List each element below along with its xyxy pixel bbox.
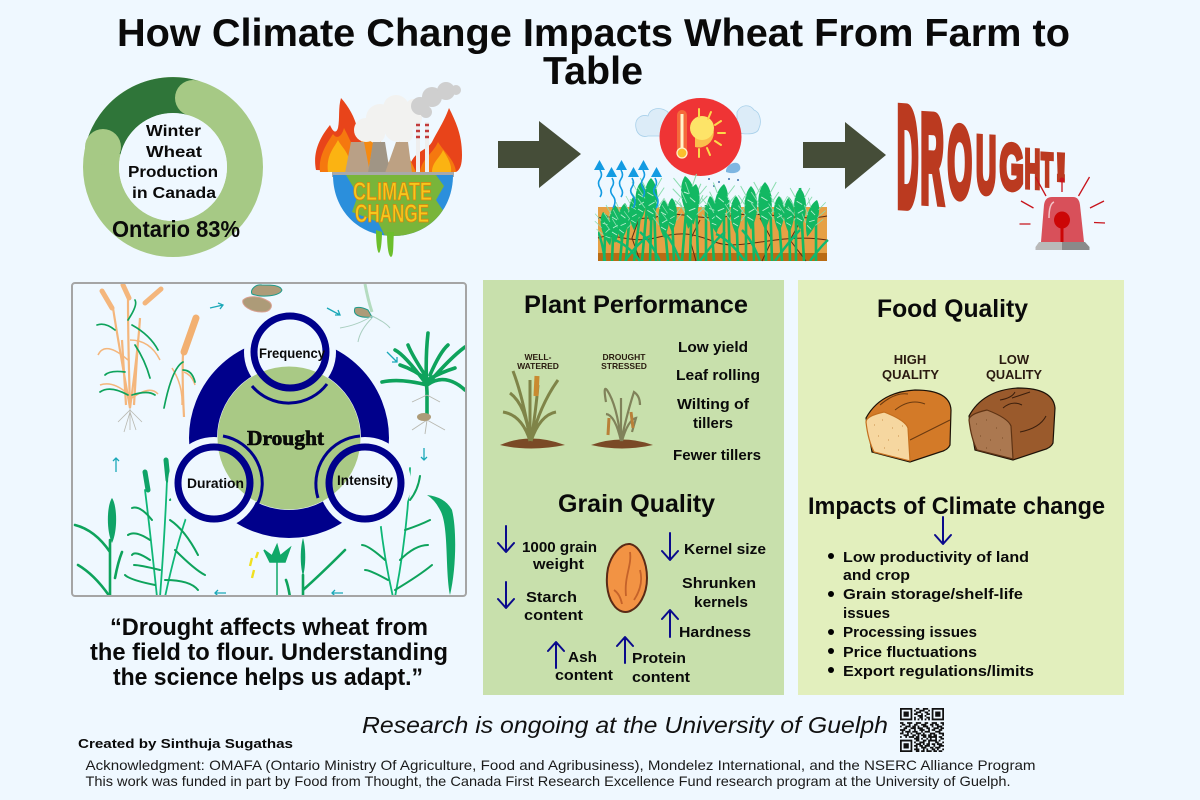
list: grain effects with arrows: kernels bbox=[694, 594, 748, 611]
list: impacts: Price fluctuations bbox=[843, 644, 977, 661]
credit: Created by Sinthuja Sugathas bbox=[78, 736, 293, 751]
list: grain effects with arrows: content bbox=[555, 667, 613, 684]
list: grain effects with arrows: content bbox=[524, 607, 583, 624]
donut chart: winter wheat production: Production bbox=[128, 164, 218, 181]
list: grain effects with arrows: Starch bbox=[526, 589, 577, 606]
list: grain effects with arrows: content bbox=[632, 669, 690, 686]
research note: Research is ongoing at the University of Guelph bbox=[362, 712, 888, 738]
acknowledgment bbox=[86, 757, 1036, 789]
drought lettering: H bbox=[1024, 137, 1040, 200]
title: How Climate Change Impacts Wheat From Farm to bbox=[117, 12, 1070, 55]
list: grain effects with arrows: Kernel size bbox=[684, 541, 766, 558]
icon: low quality bread: QUALITY bbox=[986, 367, 1042, 382]
heading: impacts of climate change: Impacts of Climate change bbox=[808, 493, 1105, 520]
quote: the field to flour. Understanding bbox=[90, 639, 448, 666]
drought lettering: T bbox=[1041, 143, 1053, 197]
arrow: impacts down bbox=[935, 517, 951, 544]
drought lettering bbox=[897, 79, 1067, 236]
panel: plant performance and grain quality bbox=[483, 280, 784, 695]
icon: drought-stressed plant: STRESSED bbox=[601, 361, 647, 371]
title bbox=[117, 12, 1070, 93]
diagram: drought cycle rings bbox=[168, 306, 411, 529]
list: grain effects with arrows: Ash bbox=[568, 649, 597, 666]
heading: grain quality: Grain Quality bbox=[558, 490, 715, 518]
list: grain effects with arrows bbox=[498, 526, 766, 686]
list: grain effects with arrows: 1000 grain bbox=[522, 539, 597, 556]
arrow: climate change to field bbox=[498, 121, 581, 188]
title: Table bbox=[543, 50, 643, 93]
drought lettering: ! bbox=[1055, 145, 1067, 189]
heading: food quality: Food Quality bbox=[877, 295, 1028, 323]
list: impacts: Grain storage/shelf-life bbox=[843, 586, 1023, 603]
icon: heat and dry wheat field bbox=[593, 98, 828, 261]
diagram: drought cycle rings: Duration bbox=[187, 475, 244, 491]
icon: low quality bread: LOW bbox=[999, 352, 1030, 367]
list: grain effects with arrows: weight bbox=[532, 556, 584, 573]
list: grain effects with arrows: Shrunken bbox=[682, 575, 756, 592]
quote: “Drought affects wheat from bbox=[110, 614, 428, 641]
icon: low quality bread bbox=[969, 352, 1055, 460]
donut chart: winter wheat production: Winter bbox=[146, 123, 201, 140]
donut chart: winter wheat production: Ontario 83% bbox=[112, 216, 240, 242]
list: plant effects bbox=[673, 339, 761, 464]
icon: climate change globe: CHANGE bbox=[355, 200, 429, 228]
quote: the science helps us adapt.” bbox=[113, 664, 423, 691]
icon: high quality bread bbox=[866, 352, 951, 462]
icon: red alarm siren bbox=[1020, 177, 1105, 250]
diagram: drought cycle rings: Drought bbox=[247, 426, 324, 450]
icon: well-watered plant bbox=[500, 352, 565, 448]
list: plant effects: Wilting of bbox=[677, 396, 750, 413]
acknowledgment: Acknowledgment: OMAFA (Ontario Ministry Of Agriculture, Food and Agribusiness), Mondelez International, and the NSERC Alliance Program bbox=[86, 757, 1036, 773]
drought lettering: R bbox=[920, 90, 944, 229]
icon: high quality bread: QUALITY bbox=[882, 367, 939, 382]
list: impacts bbox=[828, 549, 1034, 680]
list: plant effects: Fewer tillers bbox=[673, 447, 761, 464]
quote bbox=[90, 614, 448, 691]
icon: grain kernel bbox=[607, 544, 647, 612]
acknowledgment: This work was funded in part by Food from Thought, the Canada First Research Excellence Fund research program at the University of Guelph. bbox=[86, 773, 1010, 789]
list: plant effects: Leaf rolling bbox=[676, 367, 760, 384]
icon: high quality bread: HIGH bbox=[894, 352, 926, 367]
drought lettering: D bbox=[897, 79, 918, 236]
list: grain effects with arrows: Hardness bbox=[679, 624, 751, 641]
diagram: drought cycle rings: Frequency bbox=[259, 345, 325, 361]
list: impacts: issues bbox=[843, 605, 890, 622]
drought lettering: U bbox=[976, 120, 996, 210]
donut chart: winter wheat production: in Canada bbox=[132, 185, 216, 202]
drought lettering: O bbox=[948, 106, 972, 219]
icon: well-watered plant: WELL- bbox=[525, 352, 552, 362]
drought lettering: G bbox=[1000, 130, 1024, 204]
icon: climate change globe: CLIMATE bbox=[353, 178, 432, 206]
list: impacts: Processing issues bbox=[843, 624, 977, 641]
icon: QR code bbox=[900, 708, 944, 752]
diagram: drought cycle rings: Intensity bbox=[337, 472, 393, 488]
wheat life cycle illustration bbox=[75, 284, 465, 597]
panel: drought diagram bbox=[72, 283, 466, 597]
icon: drought-stressed plant: DROUGHT bbox=[603, 352, 646, 362]
list: impacts: and crop bbox=[843, 567, 910, 584]
list: impacts: Export regulations/limits bbox=[843, 663, 1034, 680]
list: impacts: Low productivity of land bbox=[843, 549, 1029, 566]
icon: well-watered plant: WATERED bbox=[517, 361, 559, 371]
icon: drought-stressed plant bbox=[591, 352, 653, 448]
donut chart: winter wheat production bbox=[85, 80, 245, 242]
donut chart: winter wheat production: Wheat bbox=[146, 144, 203, 161]
heading: plant performance: Plant Performance bbox=[524, 291, 748, 319]
list: plant effects: tillers bbox=[693, 415, 733, 432]
list: plant effects: Low yield bbox=[678, 339, 748, 356]
panel: food quality bbox=[798, 280, 1124, 695]
arrow: field to drought bbox=[803, 122, 886, 189]
list: grain effects with arrows: Protein bbox=[632, 650, 686, 667]
icon: climate change globe bbox=[315, 82, 462, 257]
